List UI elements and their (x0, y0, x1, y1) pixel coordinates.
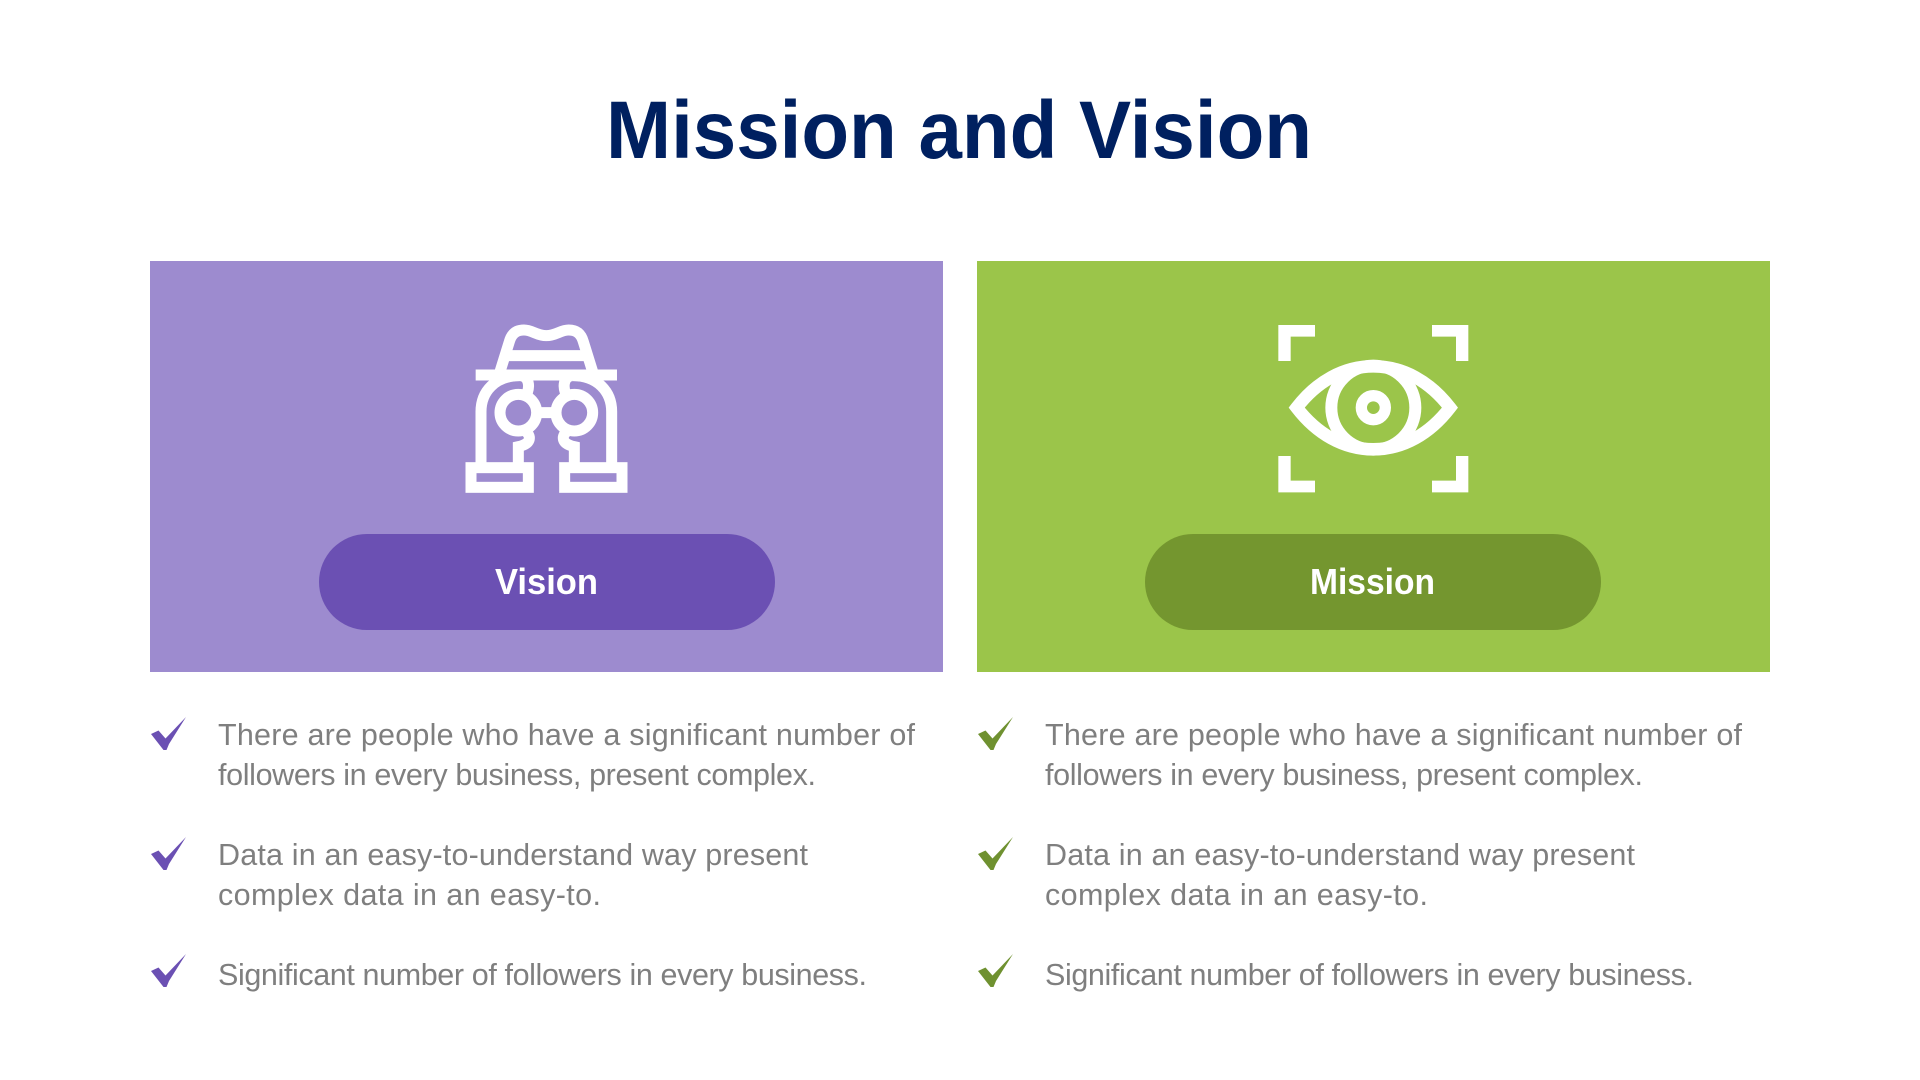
check icon 2 (151, 837, 186, 870)
title: Mission and Vision (606, 85, 1312, 176)
point 3: Significant number of followers in every business. (1045, 958, 1694, 992)
pill label: vision: Vision (495, 561, 598, 602)
list: vision points (151, 717, 916, 992)
panel: vision (150, 261, 943, 672)
panel: mission (977, 261, 1770, 672)
icon: eye in focus brackets (1278, 325, 1468, 492)
point 1: followers in every business, present complex. (1045, 758, 1643, 792)
list: mission points (978, 717, 1743, 992)
check icon 1 (978, 717, 1013, 750)
point 1: There are people who have a significant number of (218, 718, 916, 752)
pill: vision (319, 534, 775, 630)
point 3: Significant number of followers in every business. (218, 958, 867, 992)
check icon 1 (151, 717, 186, 750)
pill: mission (1145, 534, 1601, 630)
point 2: Data in an easy-to-understand way present (1045, 838, 1636, 872)
check icon 2 (978, 837, 1013, 870)
point 2: complex data in an easy-to. (1045, 878, 1428, 912)
point 2: Data in an easy-to-understand way present (218, 838, 809, 872)
point 2: complex data in an easy-to. (218, 878, 601, 912)
point 1: followers in every business, present complex. (218, 758, 816, 792)
point 1: There are people who have a significant number of (1045, 718, 1743, 752)
check icon 3 (151, 954, 186, 987)
check icon 3 (978, 954, 1013, 987)
icon: detective with binoculars (471, 330, 622, 487)
pill label: mission: Mission (1310, 561, 1435, 602)
